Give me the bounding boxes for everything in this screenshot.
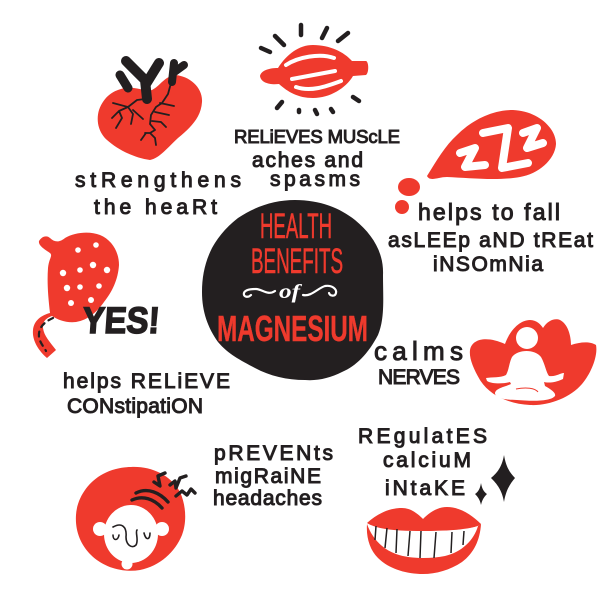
text: calms nerves: calms (374, 336, 463, 366)
text: relieves muscle aches and spasms (234, 126, 400, 191)
text: regulates calcium intake: REgulatES (358, 425, 487, 448)
text: helps to fall asleep and treat insomnia: iNSOmNia (433, 253, 543, 276)
stomach dots (60, 242, 110, 306)
icon: sparkles (475, 455, 515, 505)
text: regulates calcium intake: calciuM (383, 449, 471, 472)
text: strengthens the heart: the heaRt (94, 196, 217, 219)
text: prevents migraine headaches: pREVENts (214, 442, 333, 465)
text: helps to fall asleep and treat insomnia: helps to fall (418, 199, 560, 225)
text: prevents migraine headaches (213, 442, 333, 510)
icon: stomach (33, 233, 119, 358)
text: prevents migraine headaches: migRaiNE (215, 465, 321, 488)
pain lines (132, 491, 168, 508)
text: helps to fall asleep and treat insomnia (388, 199, 593, 276)
face lines (113, 525, 150, 547)
text: relieves muscle aches and spasms: spasms (270, 168, 360, 191)
text: helps to fall asleep and treat insomnia: asLEEp aND tREat (388, 229, 593, 252)
title: magnesium: MAGNESIUM (217, 308, 368, 349)
icon: heart (98, 61, 202, 160)
text: helps relieve constipation: helps RELiEVE (63, 370, 230, 393)
text: strengthens the heart (75, 169, 241, 219)
icon: muscle (260, 25, 368, 114)
icon: meditating figure in lotus (470, 319, 596, 405)
text: helps relieve constipation: CONstipatiON (67, 395, 203, 418)
ornament: of (244, 281, 336, 303)
text: calms nerves: NERVES (378, 366, 460, 389)
ornament: of: of (279, 281, 303, 303)
muscle rays (261, 25, 359, 114)
text: strengthens the heart: stRengthens (75, 169, 241, 192)
text: regulates calcium intake (358, 425, 487, 500)
title: health benefits: HEALTH (260, 207, 332, 246)
text: relieves muscle aches and spasms: aches and (252, 149, 363, 172)
title: health benefits: BENEFITS (251, 242, 343, 281)
icon: thought bubble zzz (395, 110, 556, 214)
icon: head with migraine (76, 467, 195, 571)
text: helps relieve constipation (63, 370, 230, 418)
text: calms nerves (374, 336, 463, 389)
icon: smiling lips (367, 507, 481, 574)
text: prevents migraine headaches: headaches (213, 487, 322, 510)
center badge (202, 200, 383, 380)
text: regulates calcium intake: iNtaKE (385, 477, 465, 500)
title: health benefits (251, 207, 343, 281)
text: relieves muscle aches and spasms: RELiEVES MUScLE (234, 126, 400, 147)
teeth lines (375, 526, 464, 558)
label: yes: YES! (81, 299, 161, 341)
